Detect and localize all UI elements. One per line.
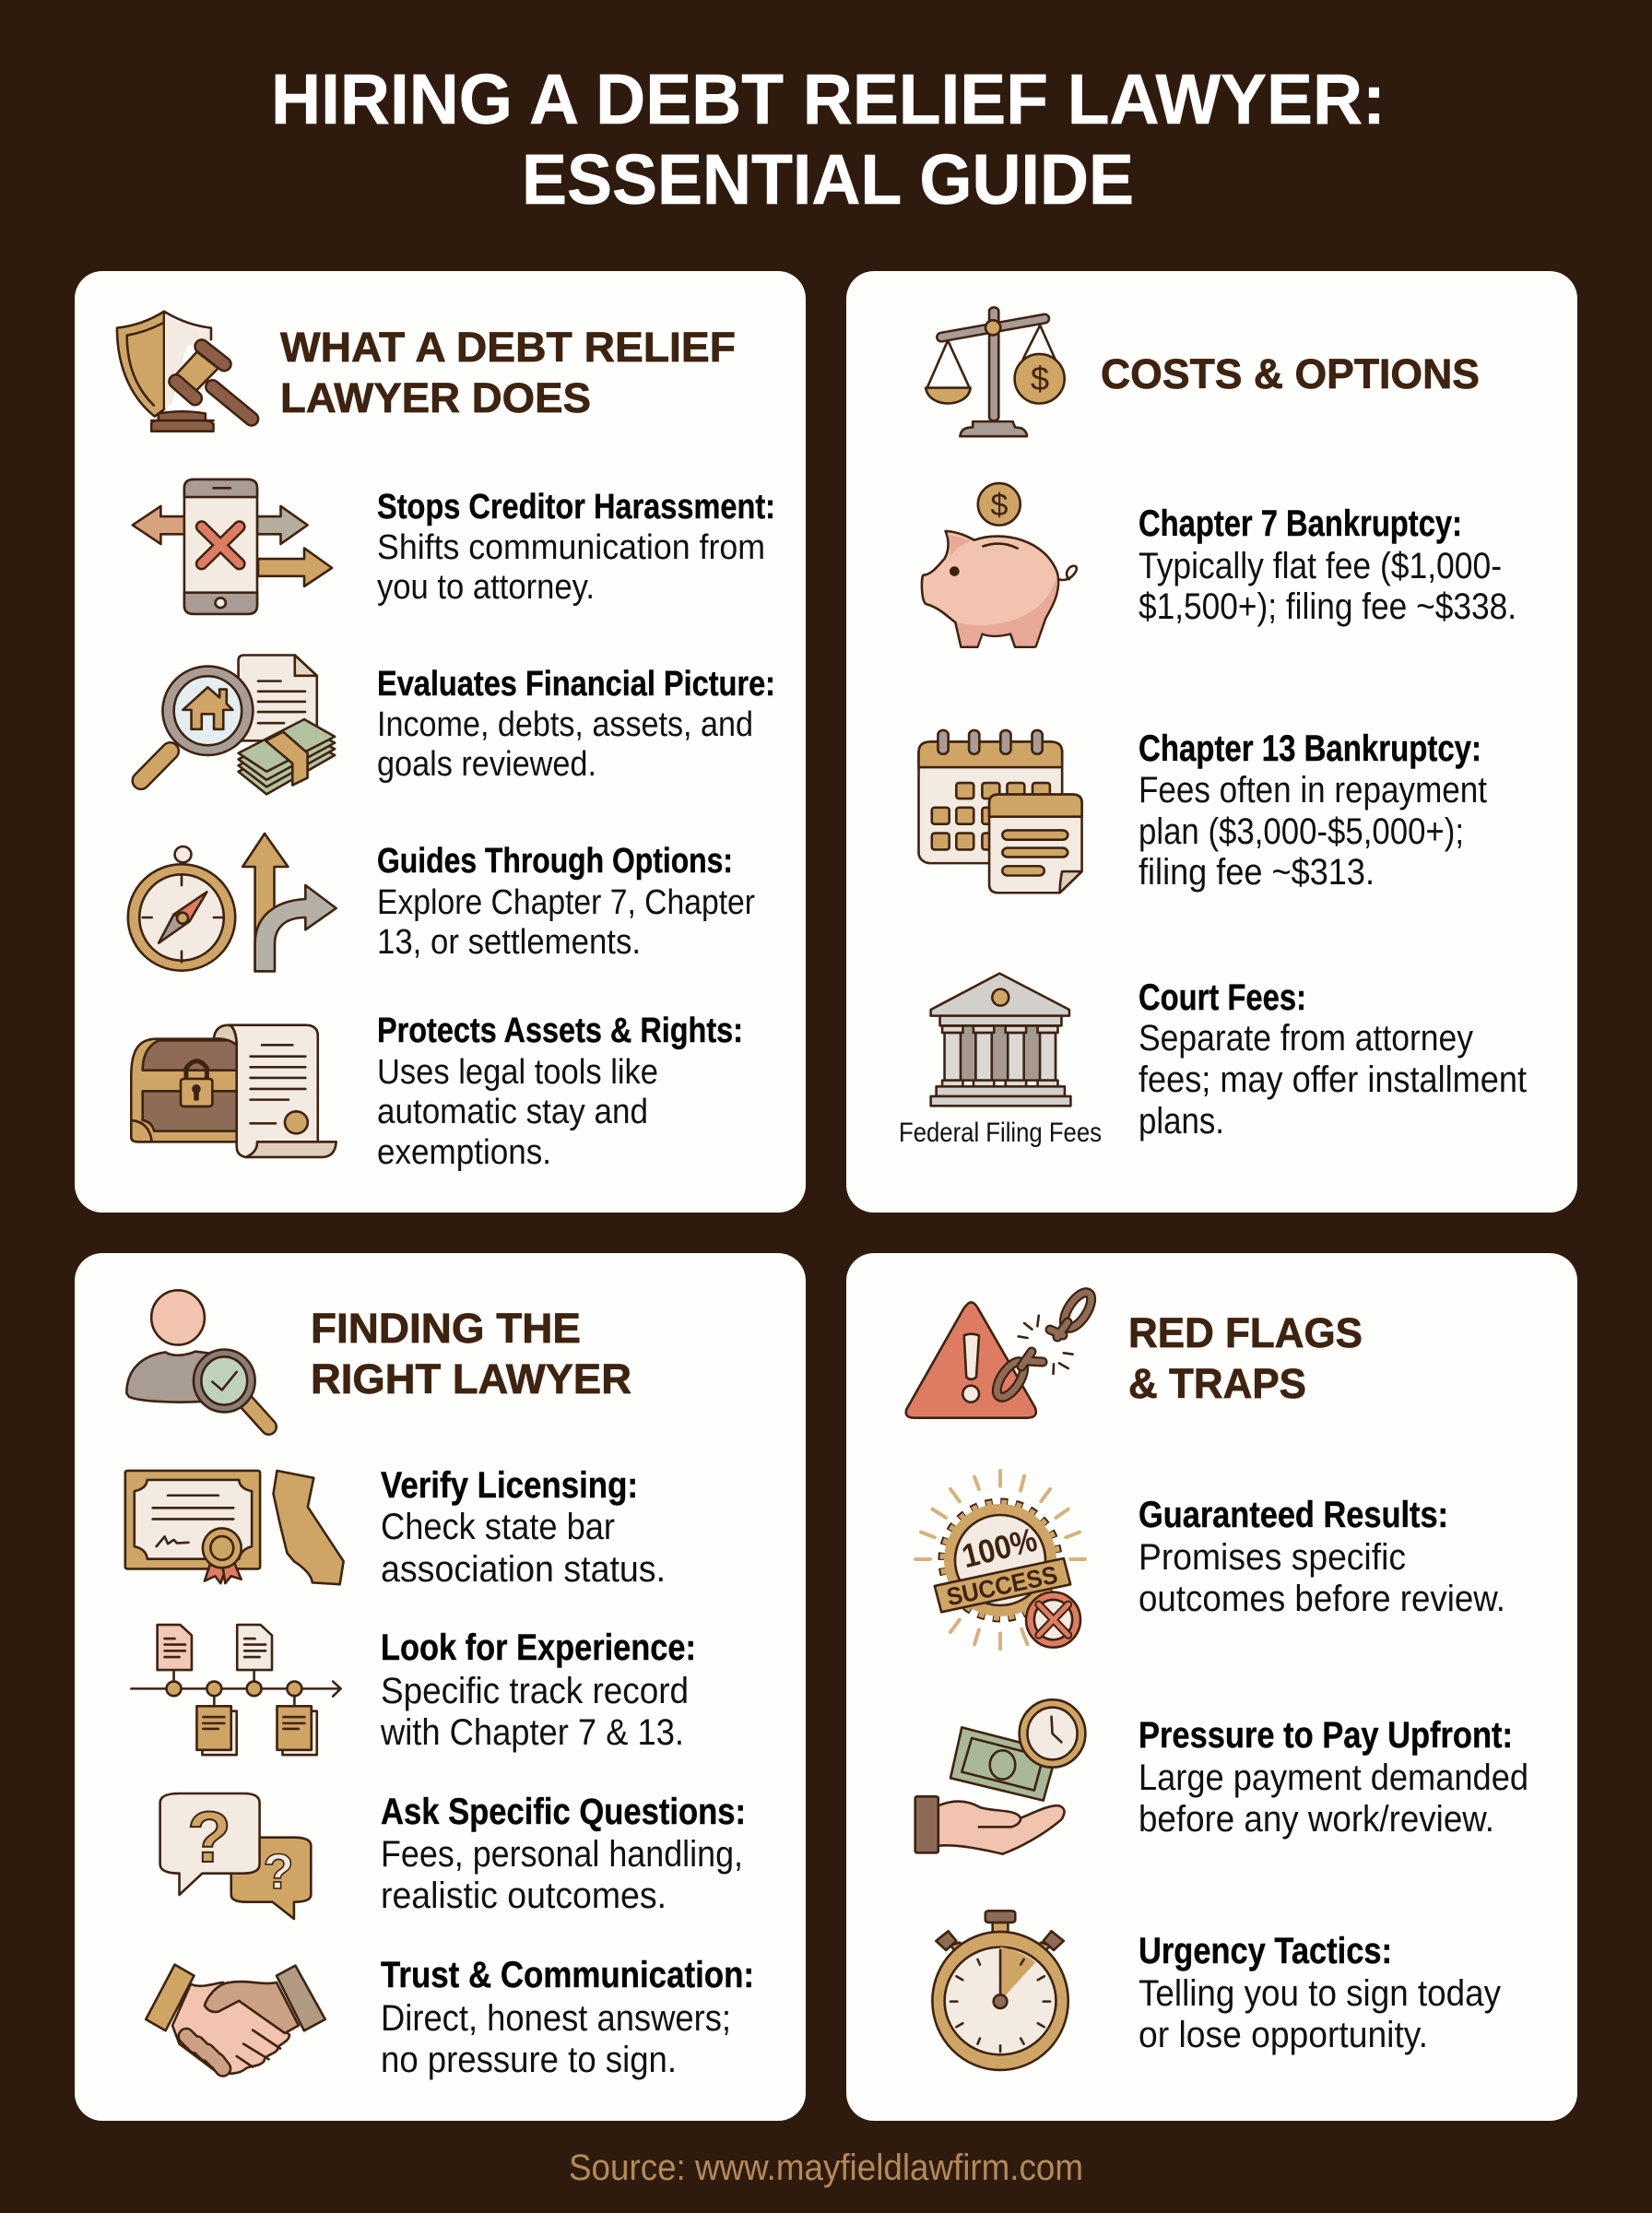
item text: chapter 7: $1,500+); filing fee ~$338. [1139, 586, 1516, 627]
item text: stops creditor harassment: you to attorney. [377, 568, 595, 607]
heading [311, 1305, 631, 1402]
item text: guaranteed results [1139, 1495, 1505, 1619]
icon: treasure chest and scroll [131, 1025, 336, 1157]
item text: urgency tactics: or lose opportunity. [1139, 2015, 1428, 2055]
item text: trust and communication: Direct, honest answers; [381, 1998, 731, 2039]
heading: RIGHT LAWYER [311, 1355, 631, 1402]
item text: guaranteed results: outcomes before review. [1139, 1579, 1505, 1619]
icon: scales with coin [926, 307, 1065, 436]
icon: document timeline [131, 1625, 341, 1755]
title: ESSENTIAL GUIDE [522, 140, 1134, 219]
item text: ask specific questions: Fees, personal handling, [381, 1834, 743, 1875]
item text: court fees [1139, 977, 1527, 1142]
heading: FINDING THE [311, 1305, 581, 1352]
heading [280, 324, 736, 421]
item text: protects assets and rights: automatic stay and [377, 1093, 648, 1131]
item text: protects assets and rights: Protects Assets & Rights: [377, 1012, 743, 1050]
icon: piggy bank and coin [922, 483, 1077, 647]
panel: finding the right lawyer [75, 1253, 806, 2121]
icon: 100% success badge with no-sign: SUCCESS [944, 1561, 1060, 1611]
item text: pressure to pay upfront: Large payment demanded [1139, 1757, 1528, 1798]
item text: guides through options: 13, or settlements. [377, 923, 641, 962]
icon: shield and gavel [117, 312, 252, 432]
panel: costs and options [846, 271, 1577, 1213]
item text: look for experience: Look for Experience: [381, 1627, 696, 1668]
item text: chapter 13: filing fee ~$313. [1139, 852, 1375, 893]
item text: evaluates financial picture: goals reviewed. [377, 745, 596, 784]
item text: trust and communication: Trust & Communication: [381, 1955, 754, 1995]
item text: chapter 13: Fees often in repayment [1139, 770, 1487, 811]
item text: verify licensing: association status. [381, 1549, 666, 1590]
heading: LAWYER DOES [280, 374, 591, 421]
icon: stopwatch [932, 1911, 1068, 2070]
item text: guaranteed results: Guaranteed Results: [1139, 1495, 1448, 1535]
item text: stops creditor harassment: Stops Creditor Harassment: [377, 488, 775, 527]
item text: chapter 7: Chapter 7 Bankruptcy: [1139, 503, 1462, 544]
item text: court fees: Court Fees: [1139, 977, 1306, 1018]
item text: ask specific questions: realistic outcomes. [381, 1876, 667, 1916]
heading: COSTS & OPTIONS [1101, 350, 1480, 397]
item text: look for experience: Specific track record [381, 1671, 689, 1711]
icon: phone with redirect arrows [133, 479, 332, 614]
item text: protects assets and rights: Uses legal tools like [377, 1053, 658, 1092]
item text: guides through options: Guides Through Options: [377, 842, 733, 881]
heading [1128, 1309, 1363, 1407]
icon: 100% success badge with no-sign: 100% [958, 1521, 1041, 1575]
item text: trust and communication: no pressure to sign. [381, 2040, 677, 2080]
icon: certificate and state [125, 1471, 344, 1584]
item text: guides through options: Explore Chapter 7, Chapter [377, 883, 755, 922]
item text: evaluates financial picture: Income, debts, assets, and [377, 705, 753, 744]
icon: piggy bank and coin: $ [991, 488, 1009, 523]
icon: calendars [919, 730, 1082, 893]
item text: pressure to pay upfront: Pressure to Pay Upfront: [1139, 1715, 1513, 1756]
item text: verify licensing: Verify Licensing: [381, 1465, 638, 1506]
item text: chapter 13 [1139, 728, 1487, 893]
icon: 100% success badge with no-sign [915, 1471, 1085, 1649]
icon caption: Federal Filing Fees [899, 1118, 1102, 1148]
item text: guaranteed results: Promises specific [1139, 1537, 1406, 1578]
item text: look for experience [380, 1627, 696, 1753]
item text: ask specific questions: Ask Specific Questions: [381, 1792, 746, 1832]
item text: protects assets and rights: exemptions. [377, 1133, 551, 1172]
item text: urgency tactics: Urgency Tactics: [1139, 1931, 1392, 1971]
item text: court fees: Separate from attorney [1139, 1018, 1473, 1059]
heading: WHAT A DEBT RELIEF [280, 324, 736, 371]
heading: & TRAPS [1128, 1360, 1306, 1407]
item text: court fees: plans. [1139, 1101, 1224, 1142]
item text: chapter 7: Typically flat fee ($1,000- [1139, 546, 1502, 586]
item text: chapter 13: Chapter 13 Bankruptcy: [1139, 728, 1481, 769]
item text: urgency tactics [1139, 1931, 1501, 2055]
icon: question bubbles [160, 1793, 311, 1919]
item text: evaluates financial picture: Evaluates Financial Picture: [377, 665, 775, 704]
item text: trust and communication [381, 1955, 754, 2080]
item text: evaluates financial picture [377, 665, 775, 784]
title [271, 60, 1386, 219]
item text: ask specific questions [381, 1792, 746, 1916]
item text: look for experience: with Chapter 7 & 13. [380, 1712, 684, 1753]
item text: chapter 7 [1139, 503, 1516, 627]
icon: scales with coin: $ [1031, 360, 1049, 397]
icon: person with magnifier [126, 1290, 269, 1426]
item text: court fees: fees; may offer installment [1139, 1059, 1527, 1100]
icon: compass and forked arrows [128, 834, 336, 971]
icon: question bubbles: ? [264, 1844, 293, 1899]
icon: courthouse [931, 974, 1070, 1106]
panel: red flags and traps [846, 1253, 1577, 2121]
title: HIRING A DEBT RELIEF LAWYER: [271, 60, 1386, 139]
item text: chapter 13: plan ($3,000-$5,000+); [1139, 811, 1464, 852]
icon: handshake [146, 1965, 325, 2074]
item text: urgency tactics: Telling you to sign today [1139, 1973, 1501, 2014]
item text: stops creditor harassment: Shifts communication from [377, 528, 765, 567]
source line: Source: www.mayfieldlawfirm.com [569, 2148, 1083, 2188]
item text: verify licensing: Check state bar [381, 1507, 615, 1547]
item text: stops creditor harassment [377, 488, 775, 607]
item text: protects assets and rights [377, 1012, 743, 1172]
panel: what a debt relief lawyer does [75, 271, 806, 1213]
item text: verify licensing [381, 1465, 666, 1590]
item text: pressure to pay upfront [1139, 1715, 1528, 1840]
icon: hand, banknote and clock [915, 1699, 1085, 1854]
item text: pressure to pay upfront: before any work/review. [1139, 1799, 1494, 1840]
heading: RED FLAGS [1128, 1309, 1363, 1356]
icon: warning triangle and broken chain [906, 1288, 1096, 1418]
icon: question bubbles: ? [187, 1796, 231, 1877]
icon: magnifier, document and money [141, 656, 335, 794]
item text: guides through options [377, 842, 755, 962]
